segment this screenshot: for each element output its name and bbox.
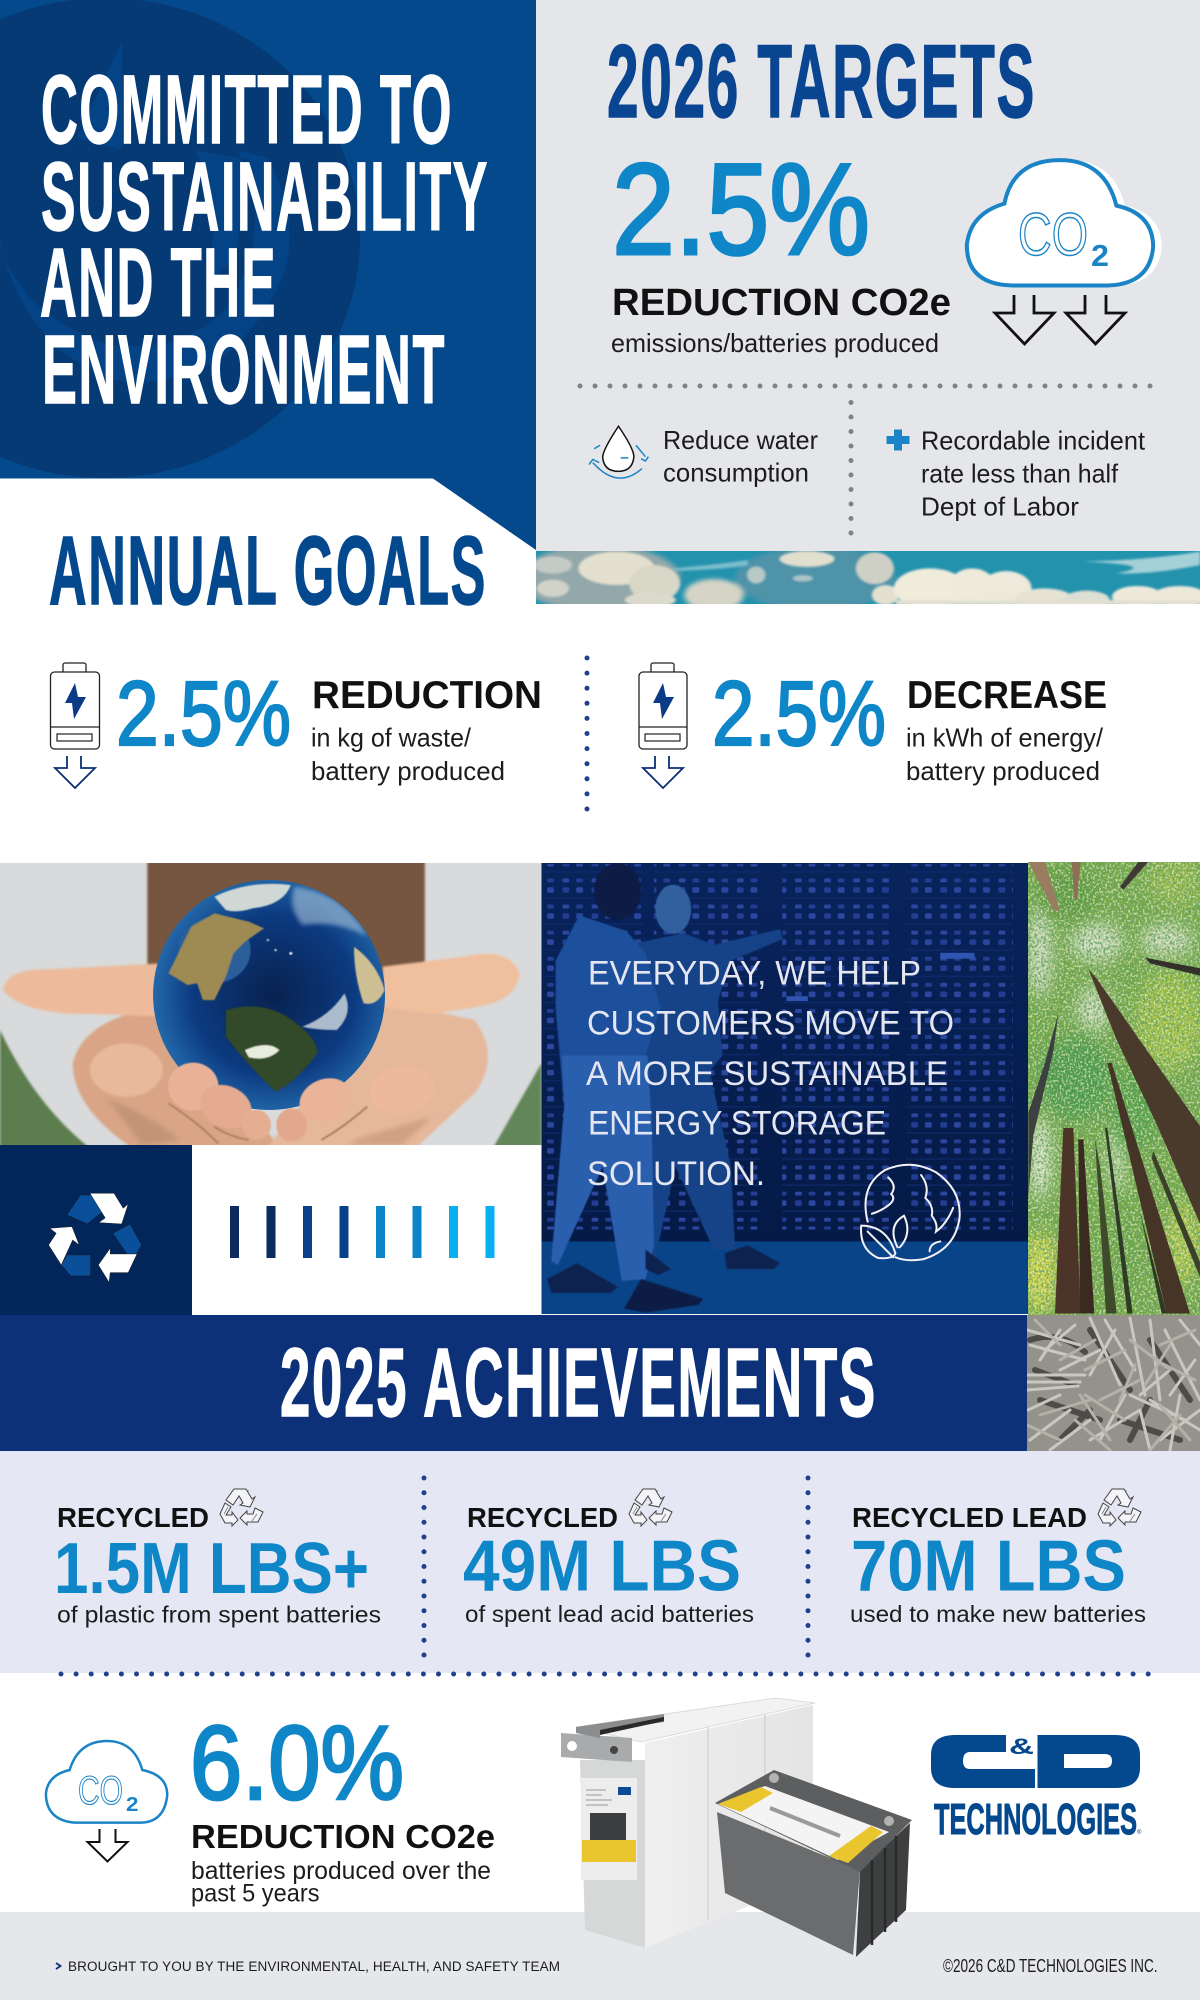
icon: down arrow (88, 1829, 128, 1862)
stat: 6.0% CO2 reduction (46, 1705, 495, 1908)
stat: recycled lead: 70M LBS (851, 1526, 1126, 1606)
globe (153, 880, 385, 1110)
text: emissions per batteries produced: emissions/batteries produced (611, 328, 939, 358)
label: reduction CO2e: REDUCTION CO2e (191, 1818, 495, 1855)
logo: C&D Technologies: & (1009, 1734, 1034, 1759)
divider dots (584, 658, 590, 810)
footer credit: BROUGHT TO YOU BY THE ENVIRONMENTAL, HEALTH, AND SAFETY TEAM (68, 1959, 560, 1974)
server racks (543, 864, 1013, 1230)
image: batteries (561, 1698, 912, 1957)
photo: sky and clouds (536, 551, 1200, 604)
icon: globe with leaves (861, 1165, 960, 1260)
label: reduction: REDUCTION (312, 674, 542, 717)
text: recordable incident rate: Dept of Labor (921, 492, 1079, 522)
title text (40, 55, 489, 424)
icon: CO2 cloud (46, 1741, 167, 1823)
icon: down arrow (55, 756, 95, 788)
divider dots (422, 1478, 426, 1656)
icon: battery (639, 663, 687, 749)
panel: 2025 achievements banner (0, 1315, 1027, 1451)
stat: recycled plastic: of plastic from spent batteries (57, 1602, 381, 1628)
text: everyday message (586, 954, 954, 1193)
stat: 2.5%: 2.5% (712, 663, 886, 765)
text: reduce water consumption: consumption (663, 458, 809, 488)
person: front (547, 863, 703, 1313)
goal: waste reduction (50, 663, 542, 788)
icon: recycle outline (629, 1489, 672, 1526)
logo: C&D Technologies: ® (1137, 1829, 1142, 1836)
title text: ENVIRONMENT (42, 315, 446, 424)
text: kwh of energy: in kWh of energy/ (906, 722, 1104, 752)
stat: 2.5%: 2.5% (612, 136, 870, 282)
icon: down arrow (643, 756, 683, 788)
text: everyday message: CUSTOMERS MOVE TO (587, 1004, 954, 1042)
stat: recycled lead: used to make new batteries (850, 1601, 1146, 1627)
stat: recycled batteries (463, 1489, 754, 1627)
foliage and sky (1023, 860, 1200, 1315)
logo: C&D Technologies (931, 1734, 1142, 1844)
floor (542, 1241, 1028, 1315)
goal: energy decrease (639, 663, 1107, 788)
panel: customer message on server room photo (542, 863, 1028, 1315)
stat: recycled plastic: RECYCLED (57, 1502, 209, 1533)
stat number: 6.0% (190, 1705, 404, 1822)
label: reduction CO2e: REDUCTION CO2e (612, 282, 951, 324)
icon: CO2 cloud (967, 160, 1162, 285)
panel: recycling achievements (0, 1451, 1200, 1673)
stat: recycled plastic (54, 1489, 381, 1628)
person: back (626, 885, 783, 1269)
text: recordable incident rate: Recordable incident (921, 426, 1146, 456)
text: recordable incident rate (921, 426, 1146, 522)
text: recordable incident rate: rate less than half (921, 458, 1119, 488)
icon: CO2 cloud: 2 (1091, 238, 1109, 273)
battery: tall white (561, 1698, 815, 1948)
right hand (268, 954, 520, 1147)
panel: gradient bars (192, 1145, 542, 1315)
icon: recycle outline (220, 1489, 263, 1526)
icon: plus (886, 430, 910, 450)
heading: annual goals: ANNUAL GOALS (49, 516, 487, 625)
text: batteries produced (191, 1857, 491, 1908)
cupped fingers (168, 1062, 368, 1144)
battery: dark AGM (715, 1770, 912, 1957)
text: reduce water consumption (663, 425, 818, 488)
stat: recycled lead: RECYCLED LEAD (852, 1502, 1087, 1533)
footer (0, 1912, 1200, 2000)
text: batteries produced: past 5 years (191, 1880, 320, 1908)
panel: 2026 targets (536, 0, 1200, 551)
icon: water drop (589, 426, 648, 478)
sweater and background (0, 860, 542, 1147)
divider dots (806, 1478, 810, 1656)
photo: earth in hands (0, 860, 542, 1147)
text: everyday message: EVERYDAY, WE HELP (588, 954, 921, 992)
left hand (3, 963, 279, 1147)
title text: SUSTAINABILITY (41, 142, 489, 251)
label: decrease: DECREASE (907, 674, 1107, 717)
photo: redwood forest (1023, 860, 1200, 1315)
text: kg of waste: in kg of waste/ (311, 722, 472, 752)
icon: recycle outline (1098, 1489, 1141, 1526)
stat: recycled batteries: 49M LBS (463, 1526, 741, 1606)
stat: recycled batteries: RECYCLED (467, 1502, 618, 1533)
text: kwh of energy (906, 722, 1104, 786)
icon: recycle (49, 1193, 142, 1282)
panel: title (0, 0, 536, 550)
panel: recycle (0, 1145, 192, 1315)
text: kg of waste (311, 722, 505, 786)
divider dots (580, 384, 1153, 388)
stat: 2.5%: 2.5% (116, 663, 291, 765)
text: batteries produced: batteries produced over the (191, 1857, 491, 1885)
title text: AND THE (40, 228, 277, 337)
icon: CO2 cloud: CO (1018, 201, 1088, 268)
trunks (1028, 862, 1200, 1313)
text: everyday message: ENERGY STORAGE (588, 1104, 886, 1142)
stat: recycled batteries: of spent lead acid batteries (465, 1601, 754, 1627)
text: kg of waste: battery produced (311, 756, 505, 786)
text: everyday message: SOLUTION. (587, 1155, 765, 1193)
divider dots (61, 1672, 1153, 1676)
text: everyday message: A MORE SUSTAINABLE (586, 1055, 948, 1093)
watermark emblem (0, 0, 360, 478)
text: reduce water consumption: Reduce water (663, 425, 818, 455)
icon: battery (50, 663, 100, 749)
icon: CO2 cloud: CO (78, 1769, 123, 1813)
stat: recycled plastic: 1.5M LBS+ (54, 1529, 369, 1609)
photo: plastic fibers (1027, 1315, 1200, 1451)
icon: down arrows (995, 295, 1125, 344)
title text: COMMITTED TO (41, 55, 453, 164)
text: kwh of energy: battery produced (906, 756, 1100, 786)
stat: recycled lead (850, 1489, 1146, 1627)
icon: CO2 cloud: 2 (126, 1794, 138, 1816)
